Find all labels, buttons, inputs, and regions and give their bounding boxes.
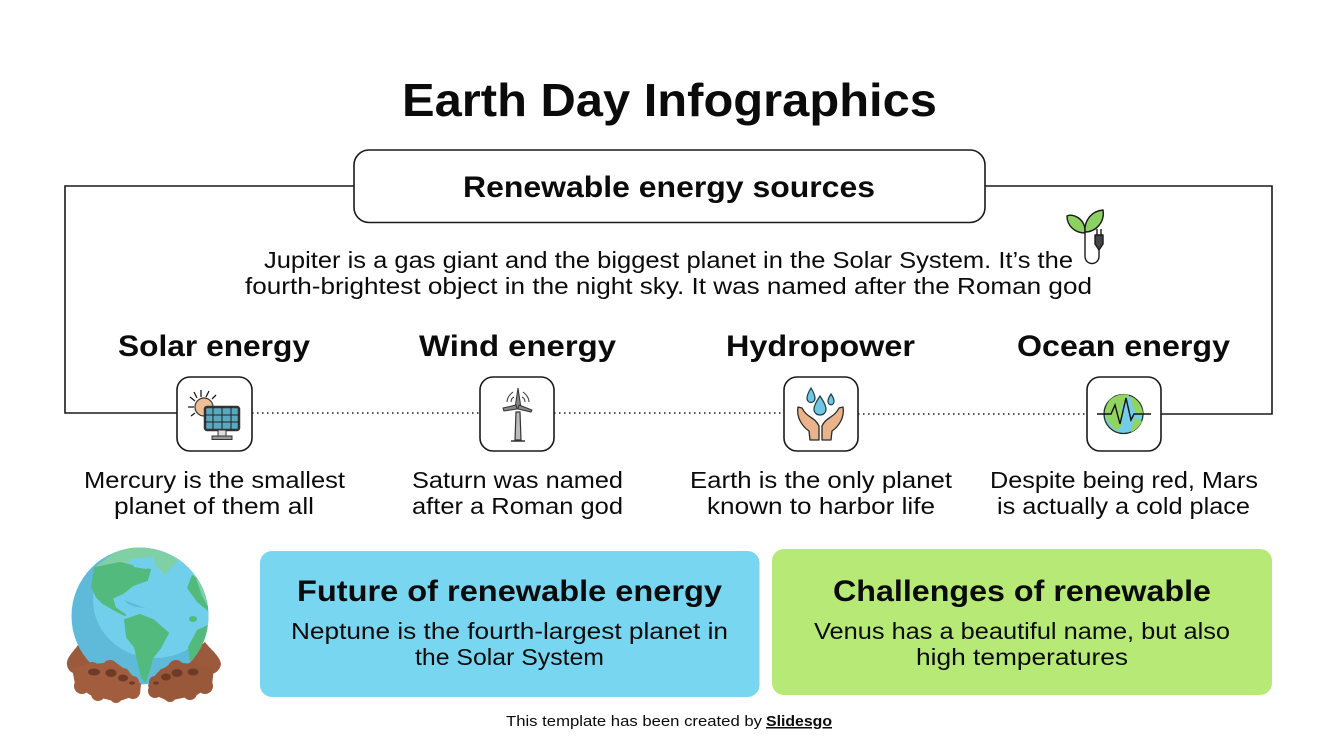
heading: wind energy: Wind energy	[419, 330, 616, 363]
panel: renewable energy sources heading: Renewable energy sources	[463, 171, 875, 204]
heading: solar energy: Solar energy	[118, 330, 310, 363]
panel: future of renewable energy: the Solar System	[415, 644, 604, 670]
left fingertips	[88, 668, 135, 685]
panel: challenges of renewable: Venus has a beautiful name, but also	[814, 618, 1230, 644]
icon: water and hands	[784, 377, 858, 451]
connector frame	[65, 186, 1272, 414]
heading: ocean energy: Ocean energy	[1017, 330, 1230, 363]
text: solar description: Mercury is the smallest	[84, 467, 346, 493]
text: wind description: Saturn was named	[412, 467, 623, 493]
panel: challenges of renewable	[772, 549, 1272, 695]
icon: globe with pulse	[1087, 377, 1161, 451]
column: hydropower: known to harbor life	[707, 493, 935, 519]
text block: intro paragraph	[245, 247, 1092, 299]
icon: leaf and plug	[1067, 210, 1103, 264]
panel: future of renewable energy: Neptune is the fourth-largest planet in	[291, 618, 728, 644]
right fingertips	[153, 668, 198, 685]
icon: wind turbine	[480, 377, 554, 451]
column: wind energy: after a Roman god	[412, 493, 623, 519]
panel: challenges of renewable: high temperatures	[916, 644, 1128, 670]
column: solar energy	[84, 330, 346, 519]
column: wind energy	[412, 330, 623, 519]
panel: renewable energy sources heading	[354, 150, 985, 222]
text block: intro paragraph: Jupiter is a gas giant and the biggest planet in the Solar System. It’s the	[264, 247, 1073, 273]
title: Earth Day Infographics	[402, 74, 937, 126]
icon: solar panel	[177, 377, 252, 451]
left hand back	[67, 645, 115, 680]
footer credit: This template has been created by	[506, 713, 763, 730]
right hand back	[170, 642, 221, 680]
panel: future of renewable energy	[260, 551, 760, 697]
left hand	[72, 660, 141, 703]
panel: challenges of renewable: Challenges of renewable	[833, 575, 1211, 608]
column: ocean energy: is actually a cold place	[997, 493, 1250, 519]
column: ocean energy	[990, 330, 1258, 519]
heading: hydropower: Hydropower	[726, 330, 915, 363]
text: hydropower description: Earth is the only planet	[690, 467, 953, 493]
panel: future of renewable energy: Future of renewable energy	[297, 575, 722, 608]
illustration: earth held in hands	[67, 542, 221, 703]
column: hydropower	[690, 330, 953, 519]
column: solar energy: planet of them all	[114, 493, 314, 519]
globe	[72, 548, 208, 684]
text block: intro paragraph: fourth-brightest object in the night sky. It was named after the Roman god	[245, 273, 1092, 299]
text: ocean description: Despite being red, Mars	[990, 467, 1258, 493]
footer credit: Slidesgo	[766, 713, 832, 730]
right hand	[148, 660, 214, 702]
